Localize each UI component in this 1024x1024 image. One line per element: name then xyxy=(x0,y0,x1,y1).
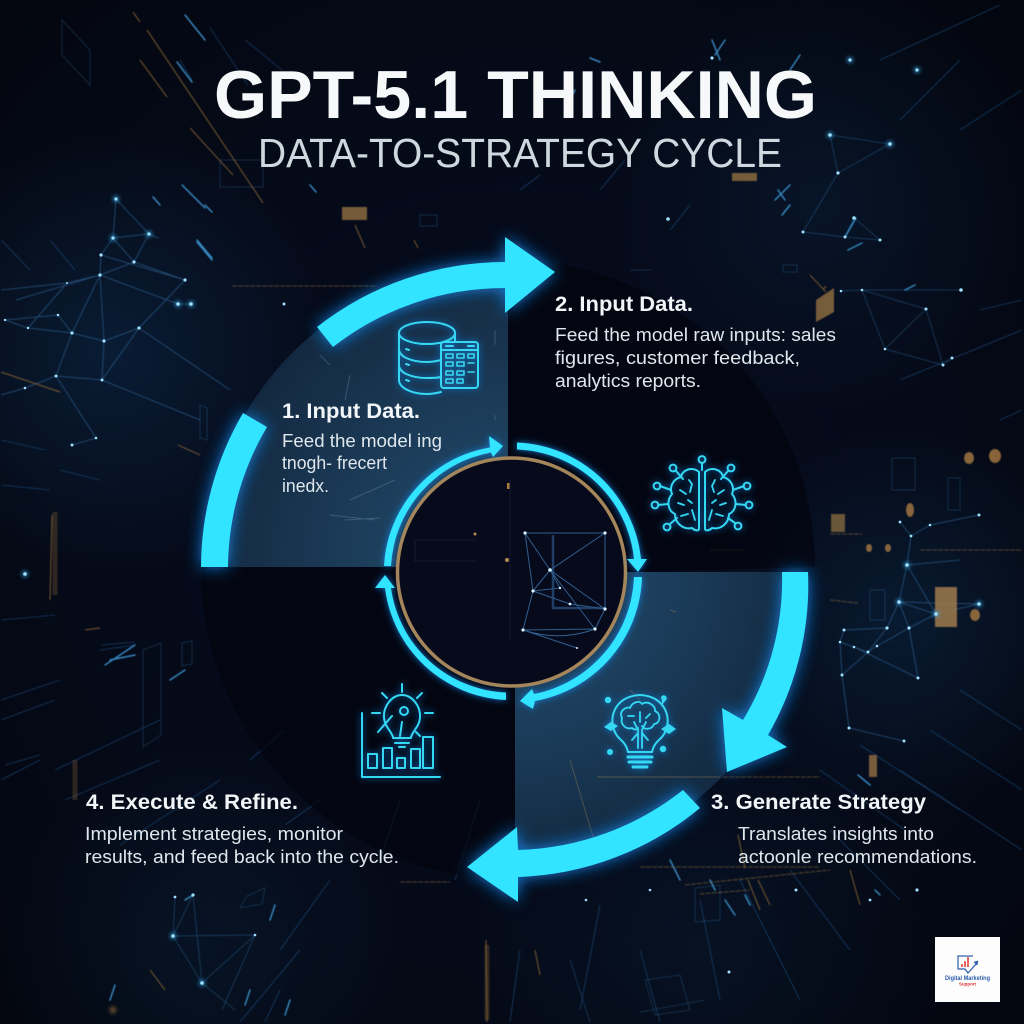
inner arrow: top right xyxy=(517,442,647,572)
step 3 body: actoonle recommendations. xyxy=(738,847,977,867)
dark quadrant behind step 2 xyxy=(508,260,815,572)
step 1 lower outer arc xyxy=(201,413,267,567)
hub network diagram xyxy=(415,480,607,649)
step 3 body: Translates insights into xyxy=(738,824,934,844)
inner arrow: bottom left xyxy=(375,575,506,700)
step 4 body: results, and feed back into the cycle. xyxy=(85,847,399,867)
logo wordmark: Digital Marketing xyxy=(945,976,990,982)
icon: lightbulb over bar chart xyxy=(362,684,440,777)
faint streaks over shaded quadrants xyxy=(320,330,760,860)
step 1 heading: 1. Input Data. xyxy=(282,400,420,423)
step 1 text xyxy=(282,400,442,496)
icon: lightbulb with brain xyxy=(604,695,676,767)
subtitle: DATA-TO-STRATEGY CYCLE xyxy=(258,130,782,176)
logo icon: chat bubble with bars xyxy=(958,956,978,973)
step 2 body xyxy=(555,325,836,391)
central hub xyxy=(375,436,647,709)
arrow: step 2 to step 3 xyxy=(722,572,808,772)
arrow: step 1 to step 2 xyxy=(317,237,555,347)
dark quadrant behind step 4 xyxy=(201,567,515,880)
main heading: GPT-5.1 THINKING xyxy=(214,57,817,133)
inner arrow: bottom right xyxy=(520,577,642,709)
step 4 body: Implement strategies, monitor xyxy=(85,824,343,844)
step 3 body xyxy=(738,824,977,867)
icon: database with table xyxy=(399,322,478,394)
step 1 body xyxy=(282,431,442,496)
step 2 heading: 2. Input Data. xyxy=(555,293,693,316)
logo tagline: Support xyxy=(959,982,976,988)
logo badge xyxy=(935,937,1000,1002)
shaded quadrant behind step 3 xyxy=(515,572,806,864)
inner arrow: top left xyxy=(384,436,503,566)
step 2 body: figures, customer feedback, xyxy=(555,348,800,368)
step 1 body: Feed the model ing xyxy=(282,431,442,451)
hub disc xyxy=(398,458,626,686)
title xyxy=(214,57,817,176)
step 4 body xyxy=(85,824,399,867)
step 1 body: tnogh- frecert xyxy=(282,453,387,473)
step 4 text xyxy=(85,791,399,867)
step 2 body: Feed the model raw inputs: sales xyxy=(555,325,836,345)
step 4 heading: 4. Execute & Refine. xyxy=(86,791,298,814)
shaded quadrant behind step 1 xyxy=(204,263,508,567)
step 2 body: analytics reports. xyxy=(555,371,701,391)
step 3 heading: 3. Generate Strategy xyxy=(711,791,926,814)
arrow: step 3 to step 4 xyxy=(467,790,700,902)
step 2 text xyxy=(555,293,836,391)
step 3 text xyxy=(711,791,977,867)
icon: brain network xyxy=(652,456,752,530)
step 1 body: inedx. xyxy=(282,476,329,496)
